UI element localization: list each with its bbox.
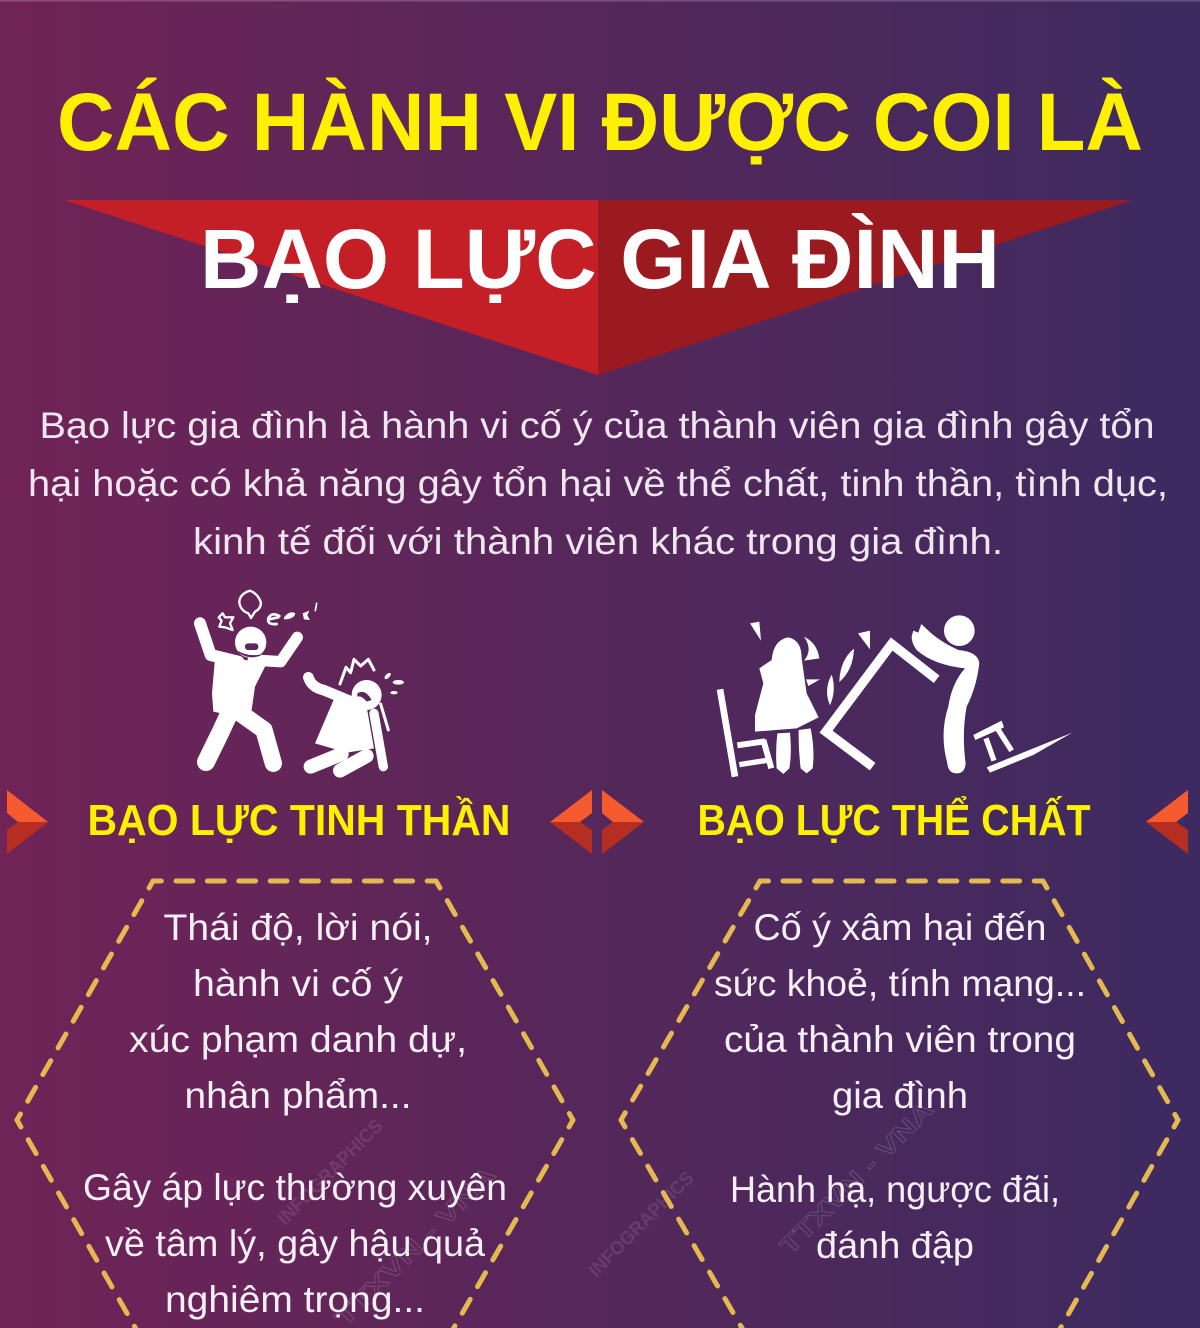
- physical violence description: sức khoẻ, tính mạng...: [714, 963, 1086, 1004]
- intro text block: Bạo lực gia đình là hành vi cố ý của thành viên gia đình gây tổn: [40, 405, 1154, 446]
- watermarks: TTXVN - VNA: [775, 1096, 939, 1260]
- psychological violence description: [83, 907, 507, 1320]
- intro text block: kinh tế đối với thành viên khác trong gia đình.: [193, 521, 1003, 562]
- psychological violence description: Gây áp lực thường xuyên: [83, 1167, 507, 1208]
- psychological violence description: nghiêm trọng...: [165, 1279, 425, 1320]
- psychological violence description: Thái độ, lời nói,: [164, 907, 432, 948]
- watermarks: [274, 1096, 939, 1328]
- heading: physical violence: BẠO LỰC THỂ CHẤT: [698, 794, 1091, 845]
- physical violence description: của thành viên trong: [724, 1019, 1076, 1060]
- heading: psychological violence: BẠO LỰC TINH THẦN: [88, 795, 510, 845]
- icon: man yelling at seated woman: [200, 591, 404, 771]
- intro text block: [28, 405, 1168, 562]
- panel: psychological violence hexagon: [17, 881, 573, 1328]
- psychological violence description: về tâm lý, gây hậu quả: [105, 1223, 485, 1264]
- physical violence description: đánh đập: [816, 1225, 974, 1266]
- physical violence description: Hành hạ, ngược đãi,: [730, 1169, 1060, 1210]
- panel: physical violence hexagon: [621, 881, 1178, 1328]
- icon: man throwing roof frame at woman on chair: [720, 615, 1072, 777]
- title line 2: BẠO LỰC GIA ĐÌNH: [200, 212, 1000, 306]
- psychological violence description: nhân phẩm...: [184, 1075, 412, 1116]
- psychological violence description: hành vi cố ý: [193, 963, 404, 1004]
- physical violence description: Cố ý xâm hại đến: [754, 907, 1046, 948]
- intro text block: hại hoặc có khả năng gây tổn hại về thể chất, tinh thần, tình dục,: [28, 463, 1168, 504]
- right edge arrow marker: [1146, 790, 1188, 854]
- banner ribbon: red arrow: [64, 200, 1133, 375]
- psychological violence description: xúc phạm danh dự,: [129, 1019, 467, 1060]
- watermarks: INFOGRAPHICS: [585, 1168, 699, 1282]
- physical violence description: [714, 907, 1086, 1266]
- arrow marker pair between headings: [550, 790, 644, 854]
- title line 1: CÁC HÀNH VI ĐƯỢC COI LÀ: [57, 77, 1143, 168]
- left edge arrow marker: [7, 790, 48, 854]
- physical violence description: gia đình: [832, 1075, 968, 1116]
- watermarks: INFOGRAPHICS: [274, 1116, 388, 1230]
